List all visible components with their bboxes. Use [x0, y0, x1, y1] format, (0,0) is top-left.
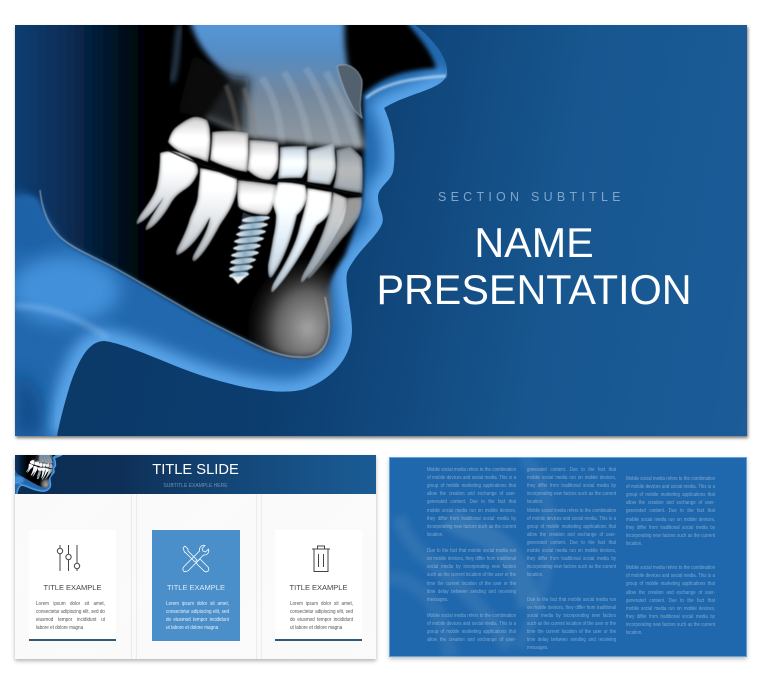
text column 3: group of mobile marketing applications that	[626, 581, 715, 587]
slide thumbnail: title slide with three cards	[15, 455, 376, 659]
card text	[166, 600, 229, 631]
card text: consectetur adipiscing elit, sed do	[36, 609, 104, 615]
text column 2: time delay between sending and receiving	[527, 637, 616, 643]
text column 3: of mobile devices and social media. This is a	[626, 573, 715, 579]
text column 3: incorporating new factors such as the current	[626, 533, 715, 539]
presentation title: NAME	[474, 220, 594, 266]
text column 2: social media by incorporating new factors	[527, 613, 616, 619]
text column 2: generated content. Due to the fact that	[527, 467, 616, 473]
header jaw thumbnail	[15, 455, 62, 494]
text column 1: group of mobile marketing applications that	[427, 629, 516, 635]
text column 2: Mobile social media refers to the combination	[527, 508, 616, 514]
card title: TITLE EXAMPLE	[44, 582, 101, 592]
text column 3: mobile social media run on mobile devices,	[626, 606, 715, 612]
card text: ut labore et dolore magna	[290, 625, 342, 631]
text column 1: generated content. Due to the fact that	[427, 499, 516, 505]
text column 2: group of mobile marketing applications that	[527, 524, 616, 530]
text column 1: group of mobile marketing applications that	[427, 483, 516, 489]
card text: do eiusmod tempor incididunt	[166, 617, 229, 623]
text column 2: messages.	[527, 645, 548, 651]
text column 3: generated content. Due to the fact that	[626, 508, 715, 514]
card 1	[29, 530, 116, 641]
slide header	[15, 455, 376, 494]
icon: sliders	[56, 545, 80, 571]
text column 1: allow the creation and exchange of user-	[427, 637, 516, 643]
text column 2: Due to the fact that mobile social media run	[527, 597, 616, 603]
text column 1	[427, 467, 516, 643]
icon: trash can	[312, 546, 330, 572]
text column 1: on mobile devices, they differ from traditional	[427, 556, 516, 562]
illustration: jaw x-ray with dental implant	[15, 25, 448, 436]
text column 3	[626, 476, 716, 636]
text column 2: such as the current location of the user or the	[527, 621, 616, 627]
presentation title: PRESENTATION	[376, 267, 692, 313]
card text: consectetur adipiscing elit, sed	[290, 609, 353, 615]
text column 3: generated content. Due to the fact that	[626, 598, 715, 604]
text column 3: location.	[626, 541, 642, 547]
text column 3: group of mobile marketing applications that	[626, 492, 715, 498]
text column 2: location.	[527, 572, 543, 578]
text column 1: social media by incorporating new factors	[427, 564, 516, 570]
text column 2: allow the creation and exchange of user-	[527, 532, 616, 538]
text column 2: mobile social media run on mobile devices,	[527, 548, 616, 554]
text column 1: messages.	[427, 597, 448, 603]
text column 1: Mobile social media refers to the combination	[427, 467, 516, 473]
text column 3: allow the creation and exchange of user-	[626, 500, 715, 506]
text column 1: incorporating new factors such as the current	[427, 524, 516, 530]
icon: wrench and screwdriver	[182, 544, 210, 572]
card title: TITLE EXAMPLE	[290, 582, 347, 592]
card 2 highlighted	[152, 530, 240, 641]
card text: ut labore et dolore magna	[166, 625, 218, 631]
text column 2: they differ from traditional social media by	[527, 556, 616, 562]
card text: Lorem ipsum dolor sit amet,	[166, 600, 229, 606]
text column 2: incorporating new factors such as the current	[527, 491, 616, 497]
text column 2	[527, 467, 616, 651]
text column 2: on mobile devices, they differ from traditional	[527, 605, 616, 611]
text column 1: location.	[427, 532, 443, 538]
card text	[290, 600, 353, 631]
card accent bar	[29, 639, 116, 641]
text column 3: Mobile social media refers to the combination	[626, 565, 715, 571]
header title: TITLE SLIDE	[152, 462, 239, 478]
text column 2: they differ from traditional social media by	[527, 483, 616, 489]
text column 3: mobile social media run on mobile devices,	[626, 517, 715, 523]
text column 3: incorporating new factors such as the current	[626, 622, 715, 628]
text column 3: of mobile devices and social media. This is a	[626, 484, 715, 490]
section subtitle: SECTION SUBTITLE	[438, 190, 625, 204]
card text: Lorem ipsum dolor sit amet,	[36, 600, 104, 606]
hero slide	[15, 25, 747, 436]
text column 1: mobile social media run on mobile devices,	[427, 508, 516, 514]
text column 3: they differ from traditional social media by	[626, 614, 715, 620]
text column 2: time the current location of the user or the	[527, 629, 616, 635]
text column 3: they differ from traditional social media by	[626, 525, 715, 531]
text column 2: generated content. Due to the fact that	[527, 540, 616, 546]
card text	[36, 600, 105, 631]
text column 1: Mobile social media refers to the combination	[427, 613, 516, 619]
card text: Lorem ipsum dolor sit amet,	[290, 600, 353, 606]
header subtitle: SUBTITLE EXAMPLE HERE	[163, 483, 228, 489]
card title: TITLE EXAMPLE	[167, 582, 225, 592]
card text: labore et dolore magna	[36, 625, 83, 631]
text column 3: Mobile social media refers to the combination	[626, 476, 715, 482]
text column 3: allow the creation and exchange of user-	[626, 590, 715, 596]
ghost jaw image	[390, 458, 554, 656]
text column 2: location.	[527, 499, 543, 505]
presentation title	[376, 220, 692, 313]
text column 3: location.	[626, 630, 642, 636]
text column 2: incorporating new factors such as the current	[527, 564, 616, 570]
text column 1: allow the creation and exchange of user-	[427, 491, 516, 497]
text column 1: time the current location of the user or the	[427, 581, 516, 587]
slide thumbnail: three-column text	[389, 457, 747, 657]
card text: eiusmod tempor incididunt ut	[36, 617, 104, 623]
text column 2: of mobile devices and social media. This is a	[527, 516, 616, 522]
card accent bar	[275, 639, 362, 641]
text column 1: they differ from traditional social media by	[427, 516, 516, 522]
text column 1: time delay between sending and receiving	[427, 589, 516, 595]
text column 1: such as the current location of the user or the	[427, 572, 516, 578]
text column 2: mobile social media run on mobile devices,	[527, 475, 616, 481]
card 3	[275, 530, 362, 641]
text column 1: of mobile devices and social media. This is a	[427, 475, 516, 481]
text column 1: of mobile devices and social media. This is a	[427, 621, 516, 627]
text column 1: Due to the fact that mobile social media run	[427, 548, 516, 554]
card text: consectetur adipiscing elit, sed	[166, 609, 229, 615]
card text: do eiusmod tempor incididunt	[290, 617, 353, 623]
